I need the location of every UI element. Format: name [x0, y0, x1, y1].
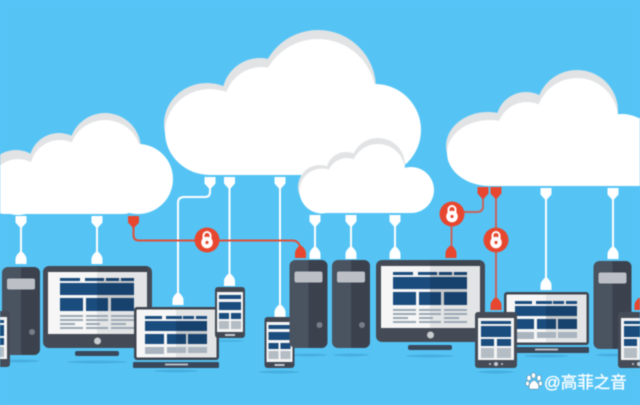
icon: lock on left link: [194, 228, 220, 252]
tablet left edge: [0, 311, 10, 367]
white connectors: [16, 177, 618, 317]
cloud: left: [0, 113, 173, 215]
tablet centre right: [475, 312, 517, 368]
red secured cables: [134, 195, 496, 300]
red connectors: [128, 187, 640, 310]
cloud: small centre: [298, 138, 434, 214]
server tower 3: [332, 260, 370, 348]
server tower 2: [290, 260, 328, 348]
phone lower: [264, 317, 294, 368]
cloud: right: [446, 70, 640, 186]
watermark: [526, 373, 627, 392]
watermark text: @高菲之音: [544, 373, 627, 392]
phone upper: [215, 287, 245, 338]
desktop monitor left: [43, 266, 152, 356]
icon: paw: [526, 373, 542, 389]
icon: lock upper right: [440, 202, 464, 226]
tablet right edge: [618, 312, 640, 368]
desktop monitor right: [376, 260, 485, 350]
device shadows: [3, 340, 628, 374]
server tower 4: [594, 261, 632, 349]
white network cables: [21, 180, 613, 306]
icon: lock lower right: [484, 228, 508, 252]
laptop left: [133, 307, 219, 368]
server tower 1: [2, 267, 40, 355]
laptop right: [503, 292, 589, 353]
cloud: large centre: [164, 30, 421, 176]
